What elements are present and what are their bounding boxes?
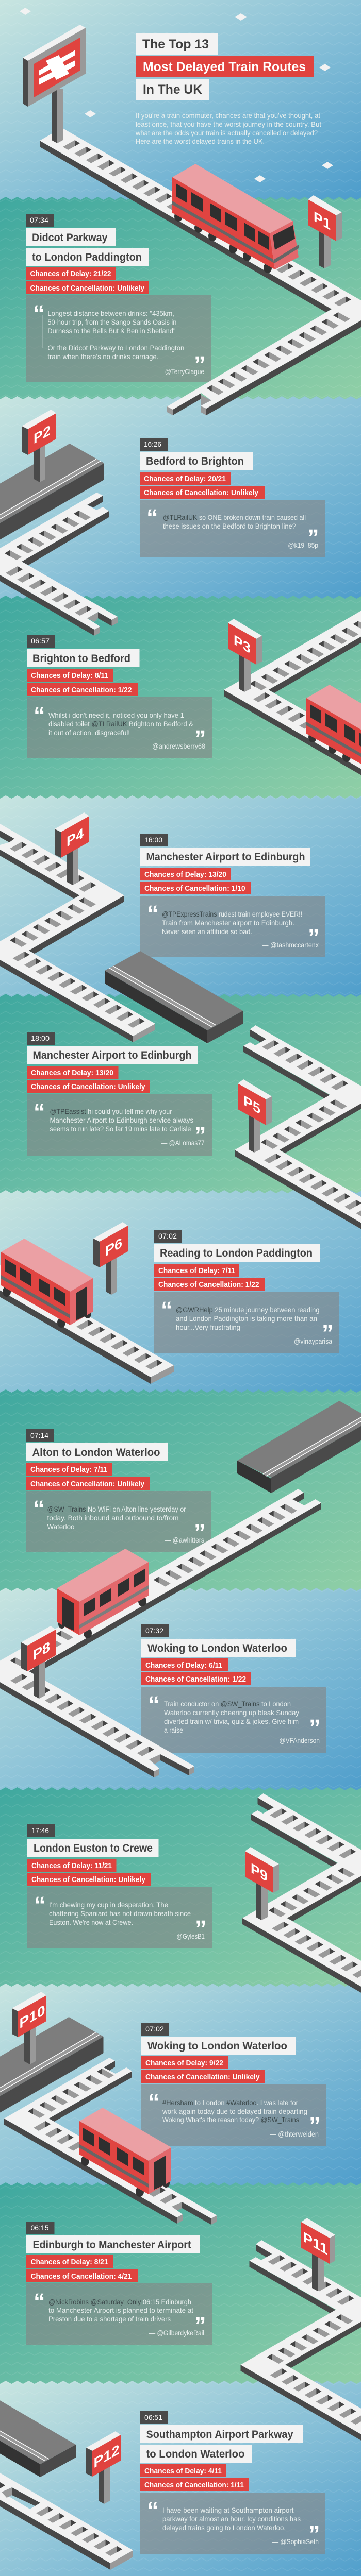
tweet quote bbox=[26, 2283, 212, 2345]
tweet quote: “ bbox=[146, 504, 158, 531]
tweet quote bbox=[141, 2084, 326, 2146]
panel: route 5 Manchester Airport to Edinburgh 18:00 bbox=[27, 1032, 212, 1156]
route title: Woking to London Waterloo bbox=[147, 2040, 287, 2052]
panel: route 11 Edinburgh to Manchester Airport bbox=[26, 2222, 212, 2345]
departure time: 07:32 bbox=[145, 1626, 163, 1635]
platform sign P1 bbox=[308, 195, 342, 268]
tweet quote: Whilst i don't need it, noticed you only have 1 bbox=[48, 711, 184, 719]
tweet quote: “ bbox=[34, 1892, 45, 1918]
chances of delay bbox=[26, 2255, 113, 2268]
chances of cancellation bbox=[141, 1672, 251, 1685]
tweet quote: — @k19_85p bbox=[280, 541, 318, 549]
train on track 8 bbox=[57, 1549, 149, 1638]
tweet quote bbox=[140, 500, 325, 557]
platform sign P8 bbox=[21, 1626, 56, 1699]
tweet quote: ” bbox=[195, 1916, 206, 1942]
tweet quote bbox=[27, 1887, 212, 1948]
route title bbox=[154, 1244, 320, 1262]
route title: Didcot Parkway bbox=[32, 232, 108, 244]
tweet quote bbox=[140, 896, 325, 957]
tweet quote: @GWRHelp 25 minute journey between reading bbox=[176, 1306, 320, 1314]
platform sign P4: P4 bbox=[67, 825, 84, 851]
platform sign P3: P3 bbox=[234, 632, 251, 657]
tweet quote: “ bbox=[148, 1691, 160, 1718]
track 3 bbox=[224, 601, 361, 785]
chances of delay bbox=[140, 868, 231, 880]
route title: Edinburgh to Manchester Airport bbox=[33, 2239, 191, 2251]
tweet quote: Train from Manchester airport to Edinburgh. bbox=[162, 919, 294, 927]
train on track 3 bbox=[306, 685, 361, 794]
tweet quote: ” bbox=[194, 351, 205, 378]
route title bbox=[26, 228, 149, 266]
chances of delay bbox=[27, 1066, 119, 1079]
panel: route 7 Alton to London Waterloo bbox=[26, 1429, 211, 1552]
tweet quote: #Hersham to London #Waterloo. I was late for bbox=[162, 2098, 298, 2107]
departure time bbox=[26, 1429, 54, 1442]
tweet quote: Preston due to a shortage of train drivers bbox=[48, 2315, 171, 2323]
tweet quote: “ bbox=[33, 300, 44, 327]
panel: route 2 Bedford to Brighton bbox=[140, 438, 325, 557]
title: Most Delayed Train Routes bbox=[143, 60, 306, 74]
route title bbox=[140, 2425, 303, 2463]
route title: Manchester Airport to Edinburgh bbox=[146, 851, 305, 863]
departure time: 06:15 bbox=[31, 2224, 49, 2232]
platform sign P9: P9 bbox=[251, 1860, 268, 1886]
tweet quote: Durness to the Bells But & Ben in Shetland" bbox=[47, 327, 175, 335]
chances of cancellation bbox=[141, 2070, 265, 2083]
departure time bbox=[27, 1824, 55, 1837]
chances of delay bbox=[140, 472, 231, 485]
panel: route 6 Reading to London Paddington bbox=[154, 1230, 339, 1353]
tweet quote bbox=[27, 1094, 212, 1156]
platform sign P2: P2 bbox=[34, 422, 51, 448]
tweet quote: @TLRailUK so ONE broken down train caused all bbox=[163, 513, 306, 521]
tweet quote: ” bbox=[308, 2521, 320, 2547]
chances of delay bbox=[140, 2464, 226, 2477]
tweet quote: “ bbox=[34, 702, 45, 728]
tweet quote: — @awhitters bbox=[165, 1536, 204, 1544]
tweet quote: “ bbox=[161, 1297, 172, 1323]
tweet quote: “ bbox=[148, 2089, 160, 2115]
platform sign P9 bbox=[245, 1847, 279, 1920]
tweet quote bbox=[26, 295, 211, 382]
platform sign P5 bbox=[238, 1079, 272, 1153]
train on track 1 bbox=[172, 164, 299, 273]
tweet quote: — @GilberdykeRail bbox=[149, 2329, 204, 2337]
tweet quote: work again today due to delayed train departing bbox=[162, 2107, 307, 2115]
chances of cancellation bbox=[27, 683, 138, 696]
tweet quote: ” bbox=[194, 1519, 205, 1546]
tweet quote: — @SophiaSeth bbox=[272, 2537, 319, 2546]
tweet quote: it out of action. disgraceful! bbox=[48, 728, 130, 737]
platform sign P4 bbox=[55, 812, 89, 885]
chances of cancellation bbox=[26, 2269, 138, 2282]
track 2 bbox=[0, 493, 118, 636]
tweet quote: “ bbox=[147, 2497, 159, 2523]
chances of delay: Chances of Delay: 13/20 bbox=[144, 871, 226, 879]
tweet quote: Euston. We're now at Crewe. bbox=[49, 1918, 133, 1926]
chances of delay: Chances of Delay: 20/21 bbox=[144, 475, 226, 483]
route title: Woking to London Waterloo bbox=[147, 1642, 287, 1654]
intro text: Here are the worst delayed trains in the UK. bbox=[136, 137, 265, 145]
chances of delay bbox=[141, 1658, 228, 1671]
route title bbox=[140, 452, 253, 470]
panel: route 4 Manchester Airport to Edinburgh 16:00 bbox=[140, 834, 325, 957]
route title bbox=[27, 649, 139, 667]
tweet quote: ” bbox=[309, 1715, 321, 1741]
tweet quote: — @ALomas77 bbox=[161, 1139, 205, 1147]
departure time bbox=[140, 834, 168, 846]
panel: route 3 Brighton to Bedford bbox=[27, 635, 212, 758]
tweet quote: — @andrewsberry68 bbox=[144, 742, 205, 750]
tweet quote bbox=[154, 1292, 339, 1353]
title: In The UK bbox=[143, 82, 202, 97]
track 4 bbox=[0, 824, 155, 1042]
train on track 10 bbox=[79, 2108, 171, 2197]
tweet quote: ” bbox=[194, 2312, 206, 2338]
track 7 and 8 bbox=[0, 1489, 321, 1777]
route title bbox=[27, 1839, 159, 1857]
route title: Alton to London Waterloo bbox=[32, 1447, 160, 1459]
road block near P2 bbox=[0, 444, 104, 557]
route title: Southampton Airport Parkway bbox=[146, 2429, 293, 2441]
tweet quote bbox=[26, 1491, 211, 1552]
tweet quote: Waterloo bbox=[47, 1522, 75, 1531]
tweet quote: delayed trains going to London Waterloo. bbox=[162, 2523, 286, 2532]
tweet quote: disabled toilet @TLRailUK Brighton to Bedford & bbox=[48, 720, 194, 728]
train on track 6 bbox=[1, 1239, 93, 1328]
route title: Brighton to Bedford bbox=[32, 653, 130, 665]
route title: Manchester Airport to Edinburgh bbox=[33, 1049, 192, 1061]
title bbox=[136, 33, 314, 100]
tweet quote: these issues on the Bedford to Brighton line? bbox=[163, 522, 296, 530]
tweet quote: — @TerryClague bbox=[157, 367, 204, 376]
route title: Bedford to Brighton bbox=[146, 455, 244, 467]
route title bbox=[141, 1639, 296, 1657]
tweet quote: diverted train w/ trivia, quiz & jokes. Give him bbox=[164, 1717, 299, 1725]
chances of cancellation bbox=[26, 281, 149, 294]
tweet quote bbox=[140, 2493, 325, 2554]
tweet quote: to Manchester Airport is planned to terminate at bbox=[48, 2306, 193, 2314]
chances of delay bbox=[27, 1859, 117, 1872]
tweet quote: Woking.What's the reason today? @SW_Trains bbox=[162, 2115, 299, 2124]
icon: station sign with rail logo bbox=[23, 25, 86, 143]
tweet quote: Waterloo currently cheering up bleak Sunday bbox=[164, 1708, 299, 1717]
tweet quote: I'm chewing my cup in desperation. The bbox=[49, 1901, 168, 1909]
chances of delay: Chances of Delay: 7/11 bbox=[158, 1267, 235, 1275]
route title bbox=[26, 2235, 200, 2253]
intro text: least once, that you have the worst journey in the country. But bbox=[136, 120, 321, 128]
route title bbox=[26, 1443, 168, 1461]
departure time bbox=[154, 1230, 182, 1243]
tweet quote: Or the Didcot Parkway to London Paddington bbox=[47, 344, 184, 352]
platform sign P6 bbox=[93, 1222, 128, 1295]
panel: route 10 Woking to London Waterloo 07:02 bbox=[141, 2023, 326, 2146]
platform sign P1: P1 bbox=[314, 209, 331, 234]
departure time: 06:51 bbox=[144, 2413, 162, 2421]
tweet quote: today. Both inbound and outbound to/from bbox=[47, 1514, 178, 1522]
tweet quote: Manchester Airport to Edinburgh service always bbox=[50, 1116, 193, 1124]
intro text bbox=[135, 111, 321, 145]
chances of delay bbox=[154, 1264, 239, 1277]
chances of cancellation bbox=[27, 1080, 150, 1093]
platform sign P10 bbox=[12, 1992, 46, 2064]
chances of cancellation bbox=[27, 1873, 151, 1886]
tweet quote: — @VFAnderson bbox=[271, 1736, 320, 1744]
chances of cancellation: Chances of Cancellation: 1/22 bbox=[145, 1675, 246, 1684]
tweet quote: “ bbox=[33, 1496, 44, 1522]
tweet quote: 50-hour trip, from the Sango Sands Oasis in bbox=[47, 318, 176, 326]
route title bbox=[140, 848, 310, 866]
platform sign P2 bbox=[22, 410, 56, 482]
chances of cancellation: Chances of Cancellation: 1/22 bbox=[158, 1281, 259, 1289]
tweet quote: @NickRobins @Saturday_Only 06:15 Edinburgh bbox=[48, 2298, 191, 2306]
platform sign P5: P5 bbox=[243, 1093, 260, 1118]
chances of delay: Chances of Delay: 4/11 bbox=[144, 2467, 222, 2476]
road block near P10 bbox=[0, 2017, 103, 2131]
tweet quote: @TPExpressTrains rudest train employee EVER!! bbox=[162, 910, 302, 918]
tweet quote: hour...Very frustrating bbox=[176, 1323, 240, 1331]
chances of delay bbox=[26, 1463, 112, 1476]
departure time: 06:57 bbox=[31, 637, 50, 645]
chances of delay: Chances of Delay: 8/21 bbox=[31, 2258, 108, 2266]
departure time bbox=[140, 2411, 168, 2424]
tweet quote: ” bbox=[322, 1320, 333, 1346]
road block near P12 bbox=[0, 2385, 76, 2477]
tweet quote: I have been waiting at Southampton airport bbox=[162, 2506, 294, 2514]
tweet quote: a raise bbox=[164, 1726, 183, 1734]
departure time: 18:00 bbox=[31, 1034, 50, 1042]
road block near P4 bbox=[105, 951, 243, 1043]
departure time: 07:02 bbox=[145, 2025, 164, 2033]
tweet quote: @SW_Trains No WiFi on Alton line yesterday or bbox=[47, 1505, 186, 1513]
platform sign P11: P11 bbox=[303, 2229, 328, 2259]
departure time bbox=[141, 2023, 169, 2036]
chances of cancellation bbox=[140, 486, 265, 499]
road block near route 7 bbox=[237, 1401, 361, 1493]
panel: route 12 Southampton Airport Parkway bbox=[140, 2411, 325, 2554]
platform sign P12: P12 bbox=[94, 2442, 119, 2471]
chances of cancellation: Chances of Cancellation: Unlikely bbox=[145, 2073, 260, 2081]
tweet quote bbox=[141, 1687, 326, 1753]
route title bbox=[141, 2037, 296, 2055]
intro text: what are the odds your train is actually cancelled or delayed? bbox=[135, 129, 318, 137]
tweet quote: ” bbox=[194, 1122, 206, 1148]
departure time: 07:34 bbox=[30, 216, 48, 224]
chances of cancellation: Chances of Cancellation: Unlikely bbox=[31, 1876, 145, 1884]
track 11 bbox=[240, 2240, 361, 2462]
departure time: 07:14 bbox=[30, 1431, 48, 1439]
tweet quote: Train conductor on @SW_Trains to London bbox=[164, 1700, 291, 1708]
chances of cancellation: Chances of Cancellation: 4/21 bbox=[31, 2273, 132, 2281]
platform sign P8: P8 bbox=[33, 1639, 50, 1664]
departure time: 16:00 bbox=[144, 836, 162, 844]
departure time: 16:26 bbox=[144, 440, 161, 448]
route title: London Euston to Crewe bbox=[34, 1842, 153, 1854]
track 9 bbox=[242, 1793, 361, 2015]
chances of delay: Chances of Delay: 13/20 bbox=[31, 1069, 113, 1077]
chances of cancellation: Chances of Cancellation: 1/10 bbox=[144, 885, 245, 893]
chances of delay: Chances of Delay: 11/21 bbox=[31, 1862, 112, 1870]
chances of delay bbox=[141, 2056, 228, 2069]
departure time: 07:02 bbox=[158, 1232, 177, 1240]
departure time bbox=[26, 2222, 55, 2234]
track 6 bbox=[0, 1265, 174, 1384]
chances of delay bbox=[27, 669, 113, 682]
platform sign P3 bbox=[228, 619, 262, 692]
departure time: 17:46 bbox=[31, 1826, 49, 1835]
tweet quote: “ bbox=[147, 901, 159, 927]
chances of delay: Chances of Delay: 21/22 bbox=[30, 270, 111, 278]
chances of delay: Chances of Delay: 8/11 bbox=[31, 672, 108, 680]
chances of cancellation: Chances of Cancellation: Unlikely bbox=[30, 1480, 144, 1488]
tweet quote: train when there's no drinks carriage. bbox=[47, 352, 158, 361]
tweet quote: Longest distance between drinks: "435km, bbox=[47, 309, 174, 317]
chances of delay bbox=[26, 267, 116, 280]
chances of cancellation bbox=[140, 2478, 249, 2491]
panel: route 9 London Euston to Crewe bbox=[27, 1824, 212, 1948]
tweet quote: — @tashmccartenx bbox=[262, 941, 319, 949]
track 12 bbox=[0, 2473, 133, 2570]
route title: Reading to London Paddington bbox=[160, 1247, 313, 1259]
track 1 under station sign bbox=[40, 128, 361, 415]
tweet quote: ” bbox=[309, 2112, 321, 2139]
chances of delay: Chances of Delay: 9/22 bbox=[145, 2059, 223, 2067]
platform sign P11 bbox=[301, 2218, 335, 2291]
chances of cancellation bbox=[140, 882, 251, 894]
tweet quote: ” bbox=[307, 524, 319, 551]
chances of cancellation bbox=[26, 1477, 150, 1490]
chances of cancellation: Chances of Cancellation: Unlikely bbox=[144, 489, 258, 497]
title: The Top 13 bbox=[142, 37, 209, 52]
route title: to London Paddington bbox=[32, 251, 142, 263]
tweet quote bbox=[27, 697, 212, 758]
departure time bbox=[27, 1032, 55, 1045]
panel: route 8 Woking to London Waterloo 07:32 bbox=[141, 1624, 326, 1753]
tweet quote: Never seen an attitude so bad. bbox=[162, 927, 252, 936]
chances of cancellation: Chances of Cancellation: 1/22 bbox=[31, 686, 132, 694]
tweet quote: parkway for almost an hour. Icy conditions has bbox=[162, 2515, 301, 2523]
departure time bbox=[140, 438, 168, 451]
track 10 bbox=[4, 2058, 217, 2225]
tweet quote: ” bbox=[308, 924, 320, 951]
departure time bbox=[26, 214, 54, 227]
tweet quote: — @thterweiden bbox=[270, 2130, 319, 2138]
chances of delay: Chances of Delay: 7/11 bbox=[30, 1466, 107, 1474]
intro text: If you're a train commuter, chances are that you've thought, at bbox=[136, 111, 320, 120]
track 5 bbox=[235, 1025, 361, 1247]
chances of cancellation: Chances of Cancellation: Unlikely bbox=[31, 1083, 145, 1091]
tweet quote: — @GylesB1 bbox=[169, 1932, 205, 1940]
tweet quote: “ bbox=[34, 2289, 45, 2315]
platform sign P10: P10 bbox=[20, 2002, 45, 2032]
tweet quote: ” bbox=[194, 725, 206, 752]
tweet quote: and London Paddington is taking more than an bbox=[176, 1314, 317, 1323]
tweet quote: — @vinayparisa bbox=[286, 1337, 332, 1345]
decorative diamonds bbox=[20, 8, 333, 182]
tweet quote: seems to run late? So far 19 mins late to Carlisle bbox=[50, 1125, 191, 1133]
chances of cancellation: Chances of Cancellation: 1/11 bbox=[144, 2481, 244, 2489]
chances of cancellation bbox=[154, 1278, 265, 1291]
tweet quote: “ bbox=[34, 1099, 45, 1125]
chances of delay: Chances of Delay: 6/11 bbox=[145, 1662, 222, 1670]
departure time bbox=[27, 635, 55, 648]
chances of cancellation: Chances of Cancellation: Unlikely bbox=[30, 284, 144, 293]
tweet quote: @TPEassist hi could you tell me why your bbox=[50, 1107, 172, 1115]
route title: to London Waterloo bbox=[146, 2448, 244, 2460]
platform sign P12 bbox=[86, 2431, 121, 2504]
platform sign P6: P6 bbox=[105, 1235, 122, 1260]
departure time bbox=[141, 1624, 169, 1637]
tweet quote: chattering Spaniard has not drawn breath since bbox=[49, 1909, 191, 1918]
panel: route 1 Didcot Parkway bbox=[26, 214, 211, 382]
route title bbox=[27, 1046, 198, 1064]
